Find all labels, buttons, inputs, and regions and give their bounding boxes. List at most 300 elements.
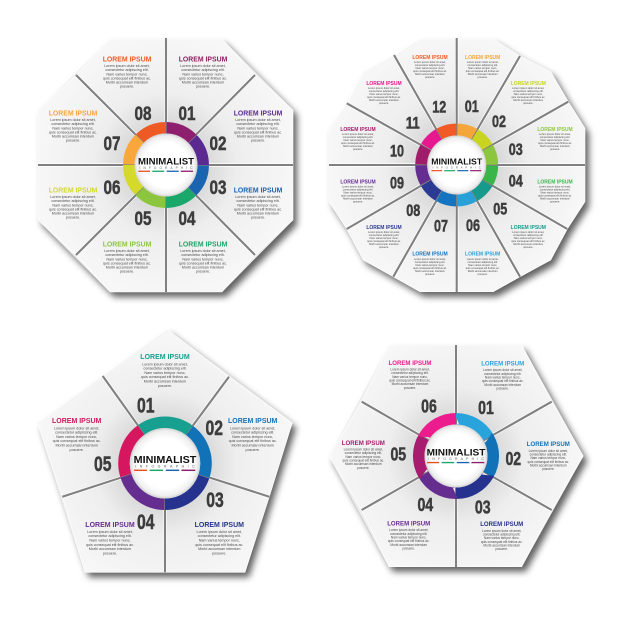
body 02: consectetur adipiscing elit. (231, 431, 274, 435)
body 10: Morbi accumsan interdum (343, 144, 373, 148)
body 06: posuere. (404, 386, 416, 390)
number 06: 06 (421, 395, 437, 416)
body 06: Morbi accumsan interdum (52, 212, 94, 216)
logo: minimalist infographic: MINIMALIST (431, 158, 482, 167)
body 10: consectetur adipiscing elit. (343, 135, 373, 139)
body 02: Nam varius tempor nunc, (514, 92, 543, 96)
body 02: posuere. (542, 467, 555, 471)
ring: 12 coloured segments (408, 116, 505, 214)
ring: 8 coloured segments (113, 112, 219, 218)
centre disc (424, 424, 488, 488)
body 06: consectetur adipiscing elit. (391, 371, 429, 375)
title 03: LOREM IPSUM (537, 127, 573, 133)
body 02: quis consequat elit finibus ac. (229, 439, 277, 443)
body 12: Lorem ipsum dolor sit amet, (414, 60, 446, 64)
body 11: Morbi accumsan interdum (369, 98, 399, 102)
logo: minimalist infographic (427, 447, 486, 463)
logo: minimalist infographic (138, 156, 195, 172)
body 07: Nam varius tempor nunc, (416, 263, 445, 267)
number 02: 02 (505, 448, 521, 469)
number 08: 08 (134, 103, 152, 125)
body 12: posuere. (425, 75, 435, 79)
logo: minimalist infographic: INFOGRAPHIC (135, 465, 195, 469)
panel 09 (329, 165, 457, 229)
panel 07 (393, 165, 457, 292)
body 01: Nam varius tempor nunc, (182, 72, 224, 76)
body 03: Morbi accumsan interdum (237, 212, 279, 216)
body 06: Nam varius tempor nunc, (468, 263, 497, 267)
body 05: Nam varius tempor nunc, (106, 257, 148, 261)
title 06: LOREM IPSUM (49, 188, 98, 194)
body 02: Lorem ipsum dolor sit amet, (512, 86, 545, 90)
title 07: LOREM IPSUM (49, 110, 98, 118)
body 02: consectetur adipiscing elit. (530, 452, 567, 456)
body 04: Morbi accumsan interdum (390, 543, 427, 547)
octagon base shadow shape (38, 39, 293, 292)
body 04: Nam varius tempor nunc, (182, 257, 224, 261)
body 05: Morbi accumsan interdum (345, 462, 382, 466)
number 01: 01 (178, 103, 196, 125)
chart: dodecagon with 12 steps (329, 38, 585, 292)
body 02: Nam varius tempor nunc, (237, 126, 279, 130)
hexagon base shadow shape (329, 345, 583, 567)
body 06: quis consequat elit finibus ac. (49, 207, 97, 211)
body 06: Lorem ipsum dolor sit amet, (390, 368, 430, 372)
body 05: Nam varius tempor nunc, (514, 236, 543, 240)
body 08: Morbi accumsan interdum (369, 242, 399, 246)
dodecagon base shadow shape (329, 39, 585, 292)
body 05: Morbi accumsan interdum (513, 242, 543, 246)
body 05: quis consequat elit finibus ac. (103, 261, 151, 265)
panel 02 (456, 402, 583, 510)
number 05: 05 (94, 453, 112, 476)
title 05: LOREM IPSUM (342, 440, 385, 447)
body 01: Nam varius tempor nunc, (468, 66, 497, 70)
body 08: quis consequat elit finibus ac. (103, 76, 151, 80)
body 02: Morbi accumsan interdum (513, 98, 543, 102)
body 11: consectetur adipiscing elit. (369, 89, 399, 93)
title 04: LOREM IPSUM (387, 520, 430, 528)
number 03: 03 (509, 140, 523, 159)
body 01: Lorem ipsum dolor sit amet, (467, 60, 499, 64)
title 12: LOREM IPSUM (412, 55, 448, 61)
centre disc (134, 134, 198, 196)
body 05: posuere. (70, 448, 84, 452)
panel 06 (362, 345, 456, 456)
body 09: consectetur adipiscing elit. (343, 188, 373, 192)
body 01: quis consequat elit finibus ac. (141, 375, 189, 379)
panel 06 (457, 165, 520, 292)
body 02: consectetur adipiscing elit. (513, 89, 544, 93)
body 04: Lorem ipsum dolor sit amet, (180, 249, 226, 253)
body 05: posuere. (120, 270, 134, 274)
body 03: Lorem ipsum dolor sit amet, (197, 530, 242, 534)
body 03: consectetur adipiscing elit. (198, 534, 241, 538)
chart: pentagon with 5 steps (37, 329, 292, 572)
body 10: Lorem ipsum dolor sit amet, (342, 132, 374, 136)
body 03: quis consequat elit finibus ac. (195, 543, 243, 547)
body 05: quis consequat elit finibus ac. (511, 239, 546, 243)
body 03: Nam varius tempor nunc, (199, 538, 240, 542)
body 11: Nam varius tempor nunc, (370, 92, 399, 96)
body 05: consectetur adipiscing elit. (55, 431, 98, 435)
body 09: quis consequat elit finibus ac. (341, 194, 375, 198)
body 12: quis consequat elit finibus ac. (413, 69, 447, 73)
body 02: posuere. (523, 101, 534, 105)
body 08: quis consequat elit finibus ac. (367, 239, 401, 243)
body 04: Lorem ipsum dolor sit amet, (389, 528, 428, 532)
body 04: Nam varius tempor nunc, (391, 535, 427, 539)
centre disc (130, 428, 200, 498)
number 01: 01 (137, 394, 155, 418)
body 02: Morbi accumsan interdum (530, 464, 567, 468)
logo: minimalist infographic (134, 455, 197, 471)
ring: 5 coloured segments (108, 406, 222, 521)
body 06: Morbi accumsan interdum (392, 382, 429, 386)
chart: octagon with 8 steps (38, 38, 293, 292)
panel 05 (37, 376, 165, 497)
body 03: Nam varius tempor nunc, (484, 536, 520, 540)
logo: minimalist infographic: MINIMALIST (427, 447, 486, 458)
body 03: quis consequat elit finibus ac. (538, 141, 572, 145)
number 07: 07 (434, 217, 448, 236)
panel 02 (457, 56, 568, 165)
body 05: Nam varius tempor nunc, (56, 435, 97, 439)
body 06: Nam varius tempor nunc, (392, 375, 428, 379)
number 02: 02 (210, 133, 227, 155)
body 06: quis consequat elit finibus ac. (389, 379, 431, 383)
number 01: 01 (465, 97, 479, 116)
number 07: 07 (104, 133, 120, 155)
body 03: consectetur adipiscing elit. (236, 199, 280, 203)
body 05: consectetur adipiscing elit. (105, 253, 149, 257)
panel 01 (456, 345, 552, 456)
body 06: Lorem ipsum dolor sit amet, (50, 195, 96, 199)
body 02: consectetur adipiscing elit. (236, 122, 280, 126)
panel 08 (76, 39, 166, 165)
number 05: 05 (493, 199, 507, 218)
body 05: quis consequat elit finibus ac. (342, 459, 384, 463)
body 08: Lorem ipsum dolor sit amet, (104, 64, 150, 68)
body 04: posuere. (550, 200, 560, 204)
number 06: 06 (466, 216, 480, 235)
title 01: LOREM IPSUM (481, 360, 524, 368)
body 03: Lorem ipsum dolor sit amet, (482, 529, 521, 533)
body 04: quis consequat elit finibus ac. (179, 261, 227, 265)
body 10: Nam varius tempor nunc, (344, 138, 373, 142)
body 01: posuere. (196, 85, 210, 89)
body 04: Morbi accumsan interdum (540, 197, 570, 201)
panel 03 (165, 463, 269, 572)
title 01: LOREM IPSUM (179, 56, 228, 64)
body 04: Nam varius tempor nunc, (89, 538, 131, 542)
title 09: LOREM IPSUM (340, 179, 376, 185)
panel 11 (347, 55, 457, 165)
number 10: 10 (390, 142, 404, 161)
body 03: posuere. (495, 547, 508, 551)
panel 05 (457, 165, 567, 277)
body 03: Lorem ipsum dolor sit amet, (235, 195, 281, 199)
body 12: consectetur adipiscing elit. (415, 63, 445, 67)
body 02: posuere. (246, 448, 260, 452)
body 04: posuere. (402, 546, 415, 550)
title 04: LOREM IPSUM (179, 242, 228, 248)
body 05: Lorem ipsum dolor sit amet, (104, 249, 150, 253)
title 08: LOREM IPSUM (366, 225, 402, 231)
body 03: Nam varius tempor nunc, (237, 203, 279, 207)
body 03: Morbi accumsan interdum (198, 547, 241, 551)
body 12: Morbi accumsan interdum (415, 72, 445, 76)
body 06: posuere. (66, 216, 80, 220)
body 11: posuere. (379, 101, 389, 105)
body 07: Morbi accumsan interdum (52, 135, 94, 139)
body 05: posuere. (523, 245, 534, 249)
body 06: quis consequat elit finibus ac. (466, 266, 500, 270)
body 07: Morbi accumsan interdum (415, 269, 445, 273)
body 04: Lorem ipsum dolor sit amet, (539, 185, 571, 189)
panel 04 (362, 456, 456, 567)
title 01: LOREM IPSUM (465, 55, 500, 61)
title 01: LOREM IPSUM (140, 354, 190, 361)
body 01: Nam varius tempor nunc, (485, 375, 521, 379)
pentagon base shadow shape (37, 329, 292, 572)
panel 01 (166, 39, 255, 165)
body 07: Lorem ipsum dolor sit amet, (414, 257, 446, 261)
body 03: quis consequat elit finibus ac. (234, 207, 282, 211)
title 05: LOREM IPSUM (52, 418, 102, 425)
number 02: 02 (492, 112, 506, 131)
body 04: Morbi accumsan interdum (182, 266, 224, 270)
title 02: LOREM IPSUM (234, 110, 283, 118)
body 01: consectetur adipiscing elit. (467, 63, 498, 67)
panel 04 (62, 463, 165, 572)
title 05: LOREM IPSUM (511, 225, 546, 231)
body 08: consectetur adipiscing elit. (105, 68, 149, 72)
body 02: Morbi accumsan interdum (237, 135, 279, 139)
body 09: Nam varius tempor nunc, (344, 191, 373, 195)
body 06: Lorem ipsum dolor sit amet, (467, 257, 499, 261)
title 02: LOREM IPSUM (228, 418, 278, 425)
title 04: LOREM IPSUM (85, 522, 135, 529)
body 08: consectetur adipiscing elit. (369, 233, 399, 237)
number 04: 04 (509, 172, 523, 191)
panel 03 (457, 102, 585, 165)
logo: minimalist infographic: MINIMALIST (134, 455, 197, 466)
body 03: consectetur adipiscing elit. (540, 135, 570, 139)
body 05: Lorem ipsum dolor sit amet, (344, 448, 383, 452)
body 02: Morbi accumsan interdum (231, 443, 274, 447)
body 06: Morbi accumsan interdum (468, 269, 498, 273)
body 01: posuere. (496, 386, 509, 390)
body 01: Lorem ipsum dolor sit amet, (483, 368, 522, 372)
number 04: 04 (137, 511, 155, 534)
body 01: Morbi accumsan interdum (182, 81, 224, 85)
panel 01 (103, 329, 229, 463)
body 08: Nam varius tempor nunc, (106, 72, 148, 76)
body 01: Morbi accumsan interdum (468, 72, 498, 76)
body 02: Lorem ipsum dolor sit amet, (235, 118, 281, 122)
body 01: quis consequat elit finibus ac. (179, 76, 227, 80)
body 03: posuere. (550, 147, 560, 151)
body 05: consectetur adipiscing elit. (345, 451, 382, 455)
body 07: quis consequat elit finibus ac. (413, 266, 447, 270)
number 01: 01 (478, 397, 494, 418)
body 02: quis consequat elit finibus ac. (511, 95, 546, 99)
title 06: LOREM IPSUM (465, 252, 500, 258)
body 12: Nam varius tempor nunc, (416, 66, 445, 70)
body 02: Lorem ipsum dolor sit amet, (230, 426, 275, 430)
title 02: LOREM IPSUM (527, 441, 570, 448)
number 04: 04 (178, 208, 196, 230)
number 05: 05 (390, 444, 406, 465)
body 05: quis consequat elit finibus ac. (53, 439, 101, 443)
body 04: consectetur adipiscing elit. (540, 188, 570, 192)
panel 08 (347, 165, 457, 277)
chart: hexagon with 6 steps (329, 345, 583, 567)
body 09: Morbi accumsan interdum (343, 197, 373, 201)
body 05: Morbi accumsan interdum (55, 443, 98, 447)
body 04: posuere. (196, 270, 210, 274)
body 02: Nam varius tempor nunc, (232, 435, 273, 439)
number 03: 03 (475, 496, 491, 517)
number 12: 12 (432, 98, 446, 117)
body 02: quis consequat elit finibus ac. (527, 460, 569, 464)
body 05: Nam varius tempor nunc, (345, 455, 381, 459)
body 02: quis consequat elit finibus ac. (234, 130, 282, 134)
body 09: Lorem ipsum dolor sit amet, (342, 185, 374, 189)
number 03: 03 (206, 489, 224, 512)
ring: 6 coloured segments (405, 405, 507, 507)
title 05: LOREM IPSUM (103, 242, 152, 248)
title 04: LOREM IPSUM (537, 179, 573, 185)
title 03: LOREM IPSUM (195, 522, 244, 529)
body 05: consectetur adipiscing elit. (513, 233, 544, 237)
number 03: 03 (210, 177, 227, 199)
body 03: quis consequat elit finibus ac. (481, 540, 523, 544)
body 07: Nam varius tempor nunc, (52, 126, 94, 130)
body 07: consectetur adipiscing elit. (415, 260, 445, 264)
body 05: Morbi accumsan interdum (106, 266, 148, 270)
body 03: consectetur adipiscing elit. (483, 532, 521, 536)
body 04: Morbi accumsan interdum (89, 547, 131, 551)
body 02: Lorem ipsum dolor sit amet, (529, 449, 568, 453)
body 04: quis consequat elit finibus ac. (388, 539, 430, 543)
body 03: posuere. (212, 551, 226, 555)
panel 05 (76, 165, 166, 292)
body 07: quis consequat elit finibus ac. (49, 130, 97, 134)
title 02: LOREM IPSUM (511, 81, 546, 87)
title 03: LOREM IPSUM (480, 521, 523, 528)
body 03: Morbi accumsan interdum (483, 544, 520, 548)
logo: minimalist infographic: INFOGRAPHIC (140, 166, 193, 170)
panel 06 (38, 165, 166, 255)
body 08: Morbi accumsan interdum (106, 81, 148, 85)
body 02: posuere. (251, 139, 265, 143)
body 01: quis consequat elit finibus ac. (466, 69, 500, 73)
panel 07 (38, 75, 166, 165)
panel 10 (329, 103, 457, 165)
body 07: posuere. (66, 139, 80, 143)
body 04: consectetur adipiscing elit. (390, 532, 428, 536)
panel 04 (457, 165, 585, 229)
body 03: posuere. (251, 216, 265, 220)
body 04: Lorem ipsum dolor sit amet, (87, 530, 133, 534)
body 04: consectetur adipiscing elit. (181, 253, 225, 257)
title 07: LOREM IPSUM (412, 252, 448, 258)
title 10: LOREM IPSUM (340, 127, 376, 133)
body 03: Morbi accumsan interdum (540, 144, 570, 148)
number 02: 02 (206, 417, 223, 440)
body 07: posuere. (425, 272, 435, 276)
panel 02 (165, 377, 292, 497)
panel 01 (457, 39, 520, 165)
number 04: 04 (417, 494, 434, 515)
body 10: quis consequat elit finibus ac. (341, 141, 375, 145)
panel 04 (166, 165, 255, 292)
body 06: Nam varius tempor nunc, (52, 203, 94, 207)
body 11: quis consequat elit finibus ac. (367, 95, 401, 99)
panel 03 (166, 165, 293, 255)
body 01: Nam varius tempor nunc, (144, 371, 186, 375)
body 01: Lorem ipsum dolor sit amet, (142, 362, 188, 366)
body 01: consectetur adipiscing elit. (484, 372, 522, 376)
body 05: Lorem ipsum dolor sit amet, (512, 230, 545, 234)
body 01: posuere. (478, 75, 488, 79)
body 05: posuere. (357, 466, 370, 470)
body 01: quis consequat elit finibus ac. (482, 379, 524, 383)
number 06: 06 (104, 177, 121, 199)
logo: minimalist infographic: MINIMALIST (138, 156, 195, 166)
body 01: Morbi accumsan interdum (484, 383, 521, 387)
body 04: quis consequat elit finibus ac. (538, 194, 572, 198)
body 01: consectetur adipiscing elit. (143, 367, 187, 371)
body 11: Lorem ipsum dolor sit amet, (368, 86, 400, 90)
number 08: 08 (406, 201, 420, 220)
logo: minimalist infographic: INFOGRAPHIC (433, 165, 481, 169)
body 08: Nam varius tempor nunc, (370, 236, 399, 240)
title 08: LOREM IPSUM (103, 56, 152, 64)
body 08: Lorem ipsum dolor sit amet, (368, 230, 400, 234)
panel 02 (166, 75, 293, 165)
body 01: posuere. (158, 384, 172, 388)
body 07: Lorem ipsum dolor sit amet, (50, 118, 96, 122)
body 08: posuere. (379, 245, 389, 249)
number 09: 09 (390, 173, 404, 192)
body 05: Lorem ipsum dolor sit amet, (54, 426, 99, 430)
body 02: Nam varius tempor nunc, (530, 456, 566, 460)
body 08: posuere. (120, 85, 134, 89)
body 09: posuere. (353, 200, 363, 204)
panel 03 (456, 456, 552, 567)
logo: minimalist infographic: INFOGRAPHIC (428, 457, 484, 461)
body 04: consectetur adipiscing elit. (88, 534, 132, 538)
body 01: Lorem ipsum dolor sit amet, (180, 64, 226, 68)
body 04: Nam varius tempor nunc, (541, 191, 570, 195)
body 07: consectetur adipiscing elit. (51, 122, 95, 126)
body 04: quis consequat elit finibus ac. (86, 543, 134, 547)
panel 12 (394, 39, 457, 165)
panel 05 (329, 402, 456, 510)
body 06: consectetur adipiscing elit. (51, 199, 95, 203)
body 03: Nam varius tempor nunc, (541, 138, 570, 142)
body 06: consectetur adipiscing elit. (467, 260, 498, 264)
body 01: Morbi accumsan interdum (144, 379, 186, 383)
title 03: LOREM IPSUM (234, 188, 283, 194)
title 06: LOREM IPSUM (388, 360, 432, 367)
title 11: LOREM IPSUM (366, 81, 402, 87)
logo: minimalist infographic (431, 158, 482, 171)
number 05: 05 (134, 208, 152, 230)
